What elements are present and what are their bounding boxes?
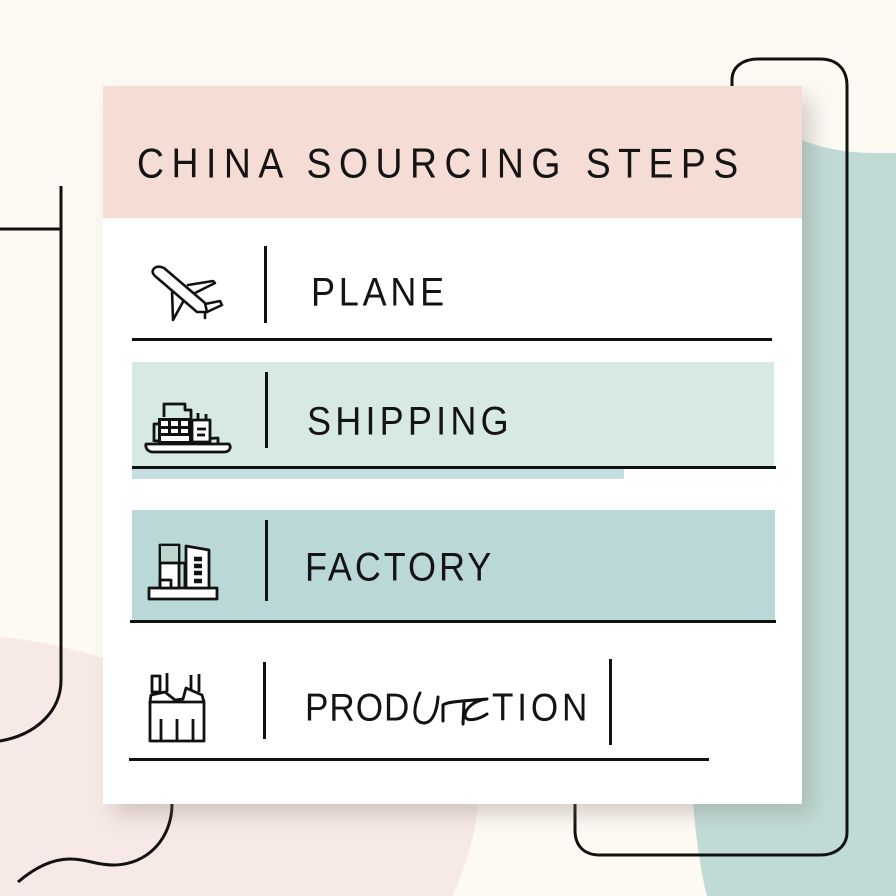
rule — [129, 758, 709, 761]
label: factory: FACTORY — [305, 546, 491, 590]
header band — [103, 86, 802, 218]
end bar — [609, 659, 612, 745]
icon: factory building — [149, 545, 217, 599]
decorative outline: bottom left squiggle — [18, 804, 172, 882]
decorative outline: right rounded frame — [575, 59, 847, 855]
row: production — [129, 659, 709, 761]
rule — [132, 466, 776, 469]
label: production end: TION — [492, 685, 587, 729]
divider — [263, 662, 266, 739]
main card — [103, 86, 802, 804]
label: plane: PLANE — [311, 271, 444, 315]
hand-drawn letters: URC — [415, 693, 487, 724]
icon: plane — [153, 267, 222, 320]
row: shipping — [132, 362, 776, 479]
label: production: PROD — [305, 685, 409, 729]
title: CHINA SOURCING STEPS — [137, 141, 738, 187]
band underlay — [132, 467, 624, 479]
row: factory — [130, 510, 776, 623]
band: shipping — [132, 362, 774, 467]
icon: production plant — [150, 673, 204, 741]
divider — [264, 246, 267, 323]
row: plane — [132, 246, 772, 341]
divider — [265, 520, 268, 601]
decorative outline: left bracket — [0, 186, 61, 741]
card shadow — [114, 98, 812, 814]
band: factory — [132, 510, 775, 620]
rule — [130, 620, 776, 623]
icon: ship — [146, 404, 230, 452]
label: shipping: SHIPPING — [307, 400, 509, 444]
rule — [132, 338, 772, 341]
background blob: teal right — [692, 135, 896, 896]
background blob: blush bottom left — [0, 637, 478, 896]
divider — [265, 372, 268, 448]
